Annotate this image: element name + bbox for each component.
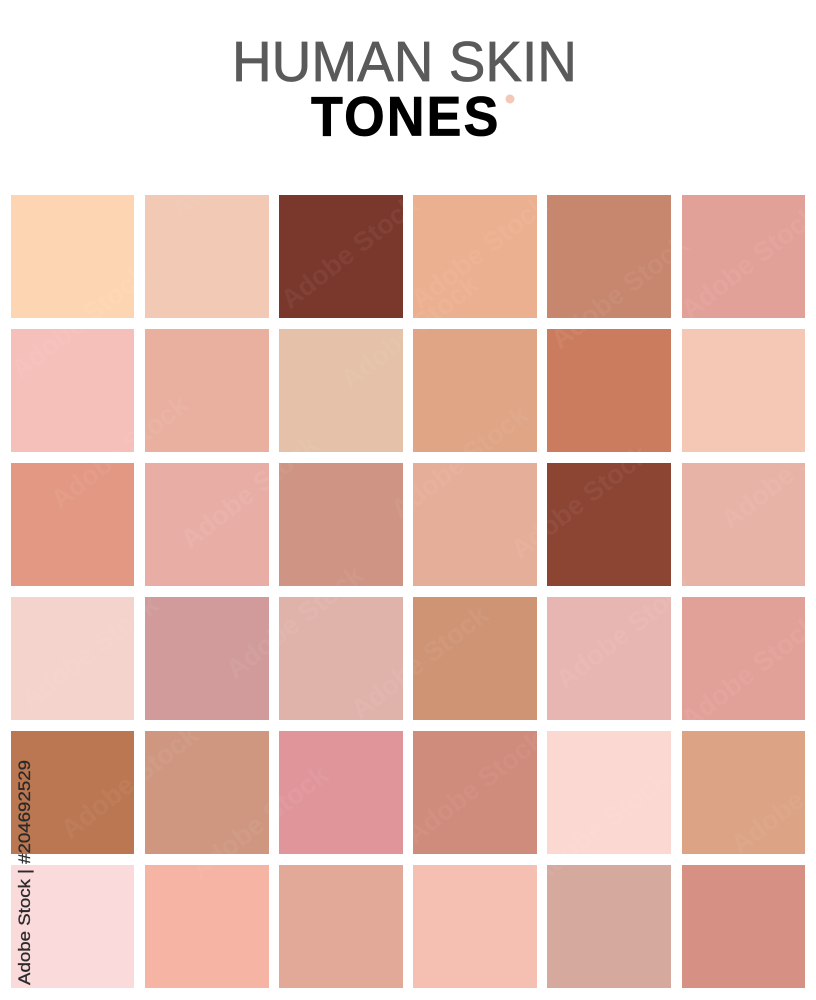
watermark pattern: Adobe Stock <box>405 189 555 315</box>
stock id label: Adobe Stock | #204692529 <box>15 760 34 985</box>
row 2 swatches <box>11 329 805 452</box>
swatch grid <box>11 195 805 988</box>
watermark pattern: Adobe Stock <box>220 559 370 685</box>
watermark pattern: Adobe Stock <box>35 59 185 185</box>
watermark pattern: Adobe Stock <box>15 589 165 715</box>
row 1 swatches <box>11 195 805 318</box>
watermark pattern: Adobe Stock <box>5 259 155 385</box>
watermark pattern: Adobe Stock <box>185 759 335 885</box>
row 5 swatches <box>11 731 805 854</box>
watermark pattern: Adobe Stock <box>165 99 315 225</box>
icon: accent dot <box>506 94 514 104</box>
watermark pattern: Adobe Stock <box>505 439 655 565</box>
watermark pattern: Adobe Stock <box>400 724 550 850</box>
heading: human skin: HUMAN SKIN <box>232 30 577 94</box>
watermark pattern: Adobe Stock <box>275 189 425 315</box>
title <box>232 30 577 148</box>
row 3 swatches <box>11 463 805 586</box>
watermark pattern: Adobe Stock <box>385 399 535 525</box>
row 4 swatches <box>11 597 805 720</box>
watermark pattern: Adobe Stock <box>525 764 675 890</box>
watermark pattern: Adobe Stock <box>550 569 700 695</box>
watermark pattern: Adobe Stock <box>545 229 695 355</box>
watermark pattern: Adobe Stock <box>175 429 325 555</box>
watermark pattern: Adobe Stock <box>345 599 495 725</box>
row 6 swatches <box>11 865 805 988</box>
watermark pattern: Adobe Stock <box>55 719 205 845</box>
watermark pattern: Adobe Stock <box>335 269 485 395</box>
watermark pattern: Adobe Stock <box>45 389 195 515</box>
heading: tones: TONES <box>311 86 501 148</box>
